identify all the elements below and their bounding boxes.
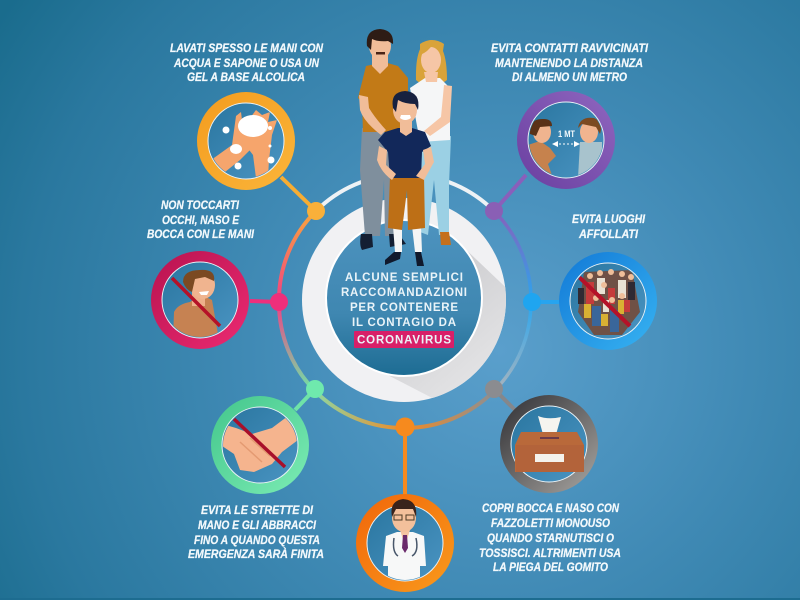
heading: wash hands: GEL A BASE ALCOLICA <box>187 70 305 84</box>
heading: tissues: TOSSISCI. ALTRIMENTI USA <box>479 546 621 560</box>
panel: avoid crowds <box>559 252 657 350</box>
illustration: family <box>358 29 452 266</box>
icon: man touching face <box>172 270 220 340</box>
panel: keep distance <box>517 91 615 189</box>
icon: crowd <box>578 269 640 335</box>
center text: PER CONTENERE <box>350 302 458 314</box>
heading: keep distance: MANTENENDO LA DISTANZA <box>495 56 643 70</box>
ring <box>356 494 454 592</box>
heading: tissues <box>479 501 621 574</box>
panel: wash hands <box>197 92 295 190</box>
heading: avoid crowds: EVITA LUOGHI <box>572 212 646 226</box>
heading: tissues: LA PIEGA DEL GOMITO <box>493 560 609 574</box>
heading: no handshakes: MANO E GLI ABBRACCI <box>198 518 317 532</box>
heading: keep distance: EVITA CONTATTI RAVVICINATI <box>491 41 649 55</box>
heading: do not touch face: BOCCA CON LE MANI <box>147 227 255 241</box>
center text: RACCOMANDAZIONI <box>341 287 467 299</box>
connector ring <box>250 174 562 500</box>
ring <box>151 251 249 349</box>
heading: do not touch face <box>147 198 255 241</box>
heading: avoid crowds: AFFOLLATI <box>578 227 639 241</box>
heading: avoid crowds <box>572 212 646 241</box>
long shadow <box>350 252 506 398</box>
boy <box>377 91 434 266</box>
center text: IL CONTAGIO DA <box>352 317 456 329</box>
heading: do not touch face: OCCHI, NASO E <box>162 213 240 227</box>
heading: no handshakes <box>188 503 324 561</box>
man <box>358 29 408 250</box>
icon: washing hands <box>207 110 277 178</box>
ring <box>211 396 309 494</box>
connector nodes <box>270 202 541 436</box>
heading: no handshakes: EVITA LE STRETTE DI <box>201 503 314 517</box>
panel: tissues <box>500 395 598 493</box>
ring <box>559 252 657 350</box>
heading: tissues: FAZZOLETTI MONOUSO <box>491 516 611 530</box>
heading: wash hands: ACQUA E SAPONE O USA UN <box>173 56 319 70</box>
ring <box>517 91 615 189</box>
heading: no handshakes: EMERGENZA SARÀ FINITA <box>188 546 324 561</box>
heading: wash hands: LAVATI SPESSO LE MANI CON <box>170 41 323 55</box>
heading: keep distance <box>491 41 649 84</box>
heading: no handshakes: FINO A QUANDO QUESTA <box>194 533 320 547</box>
ring <box>197 92 295 190</box>
heading: wash hands <box>170 41 323 84</box>
ring <box>500 395 598 493</box>
panel: do not touch face <box>151 251 249 349</box>
heading: tissues: COPRI BOCCA E NASO CON <box>482 501 619 515</box>
center text: ALCUNE SEMPLICI <box>345 272 463 284</box>
heading: do not touch face: NON TOCCARTI <box>161 198 240 212</box>
heading: tissues: QUANDO STARNUTISCI O <box>487 531 615 545</box>
heading: keep distance: DI ALMENO UN METRO <box>512 70 628 84</box>
panel: doctor <box>356 494 454 592</box>
center text <box>341 272 467 348</box>
woman <box>410 40 452 245</box>
icon: handshake <box>222 416 298 472</box>
arrow: distance <box>552 141 580 147</box>
coronavirus label: CORONAVIRUS <box>357 334 451 346</box>
icon: two people one metre apart: 1 MT <box>558 129 575 139</box>
center disc <box>302 198 506 402</box>
icon: tissue box <box>515 416 584 472</box>
icon: doctor <box>383 499 426 580</box>
panel: no handshakes <box>211 396 309 494</box>
